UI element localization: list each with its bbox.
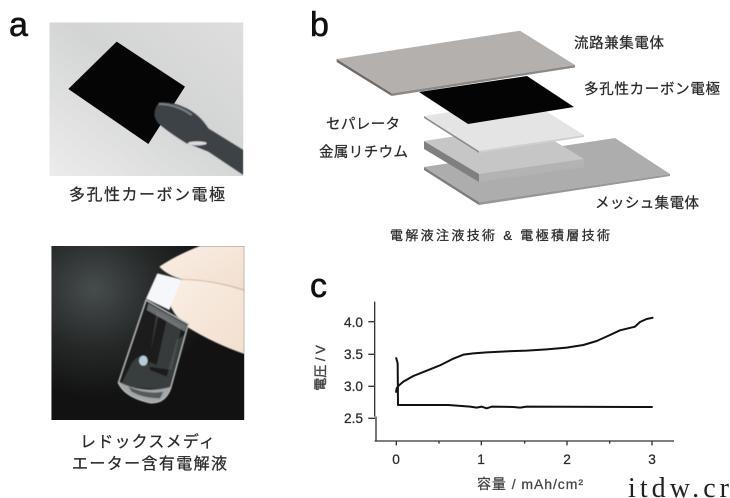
labels for stack layers: メッシュ集電体 xyxy=(595,195,700,212)
photo: porous carbon electrode held by tweezers xyxy=(49,22,243,176)
y axis tick labels: 4.0 xyxy=(344,315,363,330)
caption: porous carbon electrode: 多孔性カーボン電極 xyxy=(69,186,225,204)
fingers xyxy=(159,246,244,354)
black carbon electrode sheet xyxy=(68,42,185,144)
separator layer xyxy=(424,100,584,153)
tweezers xyxy=(154,102,243,175)
x axis tick labels: 0 xyxy=(392,452,400,467)
voltage-capacity line chart xyxy=(313,302,674,492)
labels for stack layers: 多孔性カーボン電極 xyxy=(584,80,720,98)
discharge curve xyxy=(396,357,653,408)
y axis tick labels: 3.5 xyxy=(344,347,363,362)
lithium metal layer xyxy=(424,125,584,182)
caption: redox mediator containing electrolyte: エーター含有電解液 xyxy=(72,455,227,473)
labels for stack layers: 流路兼集電体 xyxy=(574,35,664,52)
x axis tick labels: 1 xyxy=(477,452,485,467)
porous carbon electrode layer xyxy=(419,76,574,124)
x axis title: 容量 / mAh/cm² xyxy=(477,476,583,492)
x axis tick labels xyxy=(392,452,656,467)
vial xyxy=(118,273,188,405)
photo: redox mediator electrolyte vial xyxy=(51,246,244,420)
y axis tick labels: 3.0 xyxy=(344,379,363,394)
x axis tick labels: 3 xyxy=(648,452,656,467)
caption: electrolyte injection and electrode stacking technology: 電解液注液技術 & 電極積層技術 xyxy=(390,228,610,243)
panel a label: a xyxy=(9,6,28,44)
exploded cell stack diagram xyxy=(337,31,670,205)
labels for stack layers xyxy=(319,35,720,212)
caption: redox mediator containing electrolyte: レドックスメディ xyxy=(80,432,215,451)
y axis title: 電圧 / V xyxy=(313,345,328,391)
chart axes and ticks xyxy=(368,302,674,445)
flow-path current collector layer xyxy=(337,31,575,96)
x axis tick labels: 2 xyxy=(563,452,571,467)
white vial cap xyxy=(146,273,182,310)
panel b label: b xyxy=(310,6,329,44)
labels for stack layers: 金属リチウム xyxy=(319,144,408,161)
caption: redox mediator containing electrolyte xyxy=(72,432,227,473)
charge curve xyxy=(396,318,653,393)
y axis tick labels xyxy=(344,315,363,426)
panel c label: c xyxy=(310,267,327,305)
mesh current collector layer xyxy=(424,138,670,205)
labels for stack layers: セパレータ xyxy=(326,116,400,133)
y axis tick labels: 2.5 xyxy=(344,411,363,426)
